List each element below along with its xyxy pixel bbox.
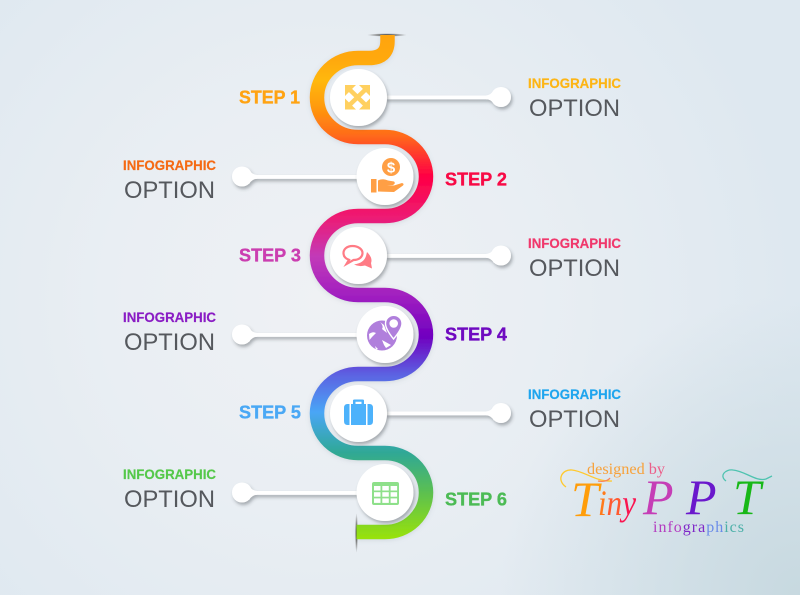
step 1 circle [330,69,387,126]
option 5 text: INFOGRAPHIC [528,387,621,402]
step 1 label: STEP 1 [239,86,300,108]
step 6 label: STEP 6 [445,488,507,510]
step 2 label: STEP 2 [445,168,507,190]
step 2 circle [356,148,414,205]
option 4 text: OPTION [124,329,215,356]
step 5 circle [330,385,387,442]
option 6 text: OPTION [124,486,215,513]
option 4 text [123,310,216,356]
step 4 circle [356,306,414,363]
step 5 label: STEP 5 [239,402,301,422]
icon: expand arrows [345,85,370,110]
icon: table grid [372,482,399,505]
option 6 text: INFOGRAPHIC [123,467,216,482]
icon: hand holding coin [371,158,404,192]
option 2 text: INFOGRAPHIC [123,158,216,173]
logo: designed by Tiny PPT infographics [561,461,772,536]
step 4 label: STEP 4 [445,324,508,344]
option 1 text [528,76,621,122]
option 2 text: OPTION [124,177,215,204]
connector: step 2 to left option [232,166,360,186]
option 3 text [528,236,621,282]
option 3 text: OPTION [529,255,620,282]
logo: designed by Tiny PPT infographics: iny [598,483,636,523]
step 6 circle [356,464,414,521]
option 1 text: INFOGRAPHIC [528,76,621,91]
logo: designed by Tiny PPT infographics: infographics [653,519,744,536]
icon: hand holding coin: $ [387,160,396,176]
icon: speech bubbles [344,246,372,268]
logo: designed by Tiny PPT infographics: P [642,469,674,525]
option 6 text [123,467,216,513]
icon: briefcase [344,400,373,425]
logo: designed by Tiny PPT infographics: T [733,469,764,525]
winding ribbon path [317,33,426,553]
connector: step 3 to right option [385,246,511,266]
logo: designed by Tiny PPT infographics: designed by [587,461,665,478]
option 5 text [528,387,621,433]
connector: step 1 to right option [385,87,511,107]
connector: step 6 to left option [232,482,360,502]
option 2 text [123,158,216,204]
logo: designed by Tiny PPT infographics: T [571,471,602,527]
option 5 text: OPTION [529,406,620,433]
logo: designed by Tiny PPT infographics: P [685,469,717,525]
step 3 circle [330,227,387,284]
option 1 text: OPTION [529,95,620,122]
icon: globe with map pin [367,315,402,350]
option 4 text: INFOGRAPHIC [123,310,216,325]
step 3 label: STEP 3 [239,244,301,266]
option 3 text: INFOGRAPHIC [528,236,621,251]
connector: step 4 to left option [232,324,360,344]
connector: step 5 to right option [385,403,511,423]
